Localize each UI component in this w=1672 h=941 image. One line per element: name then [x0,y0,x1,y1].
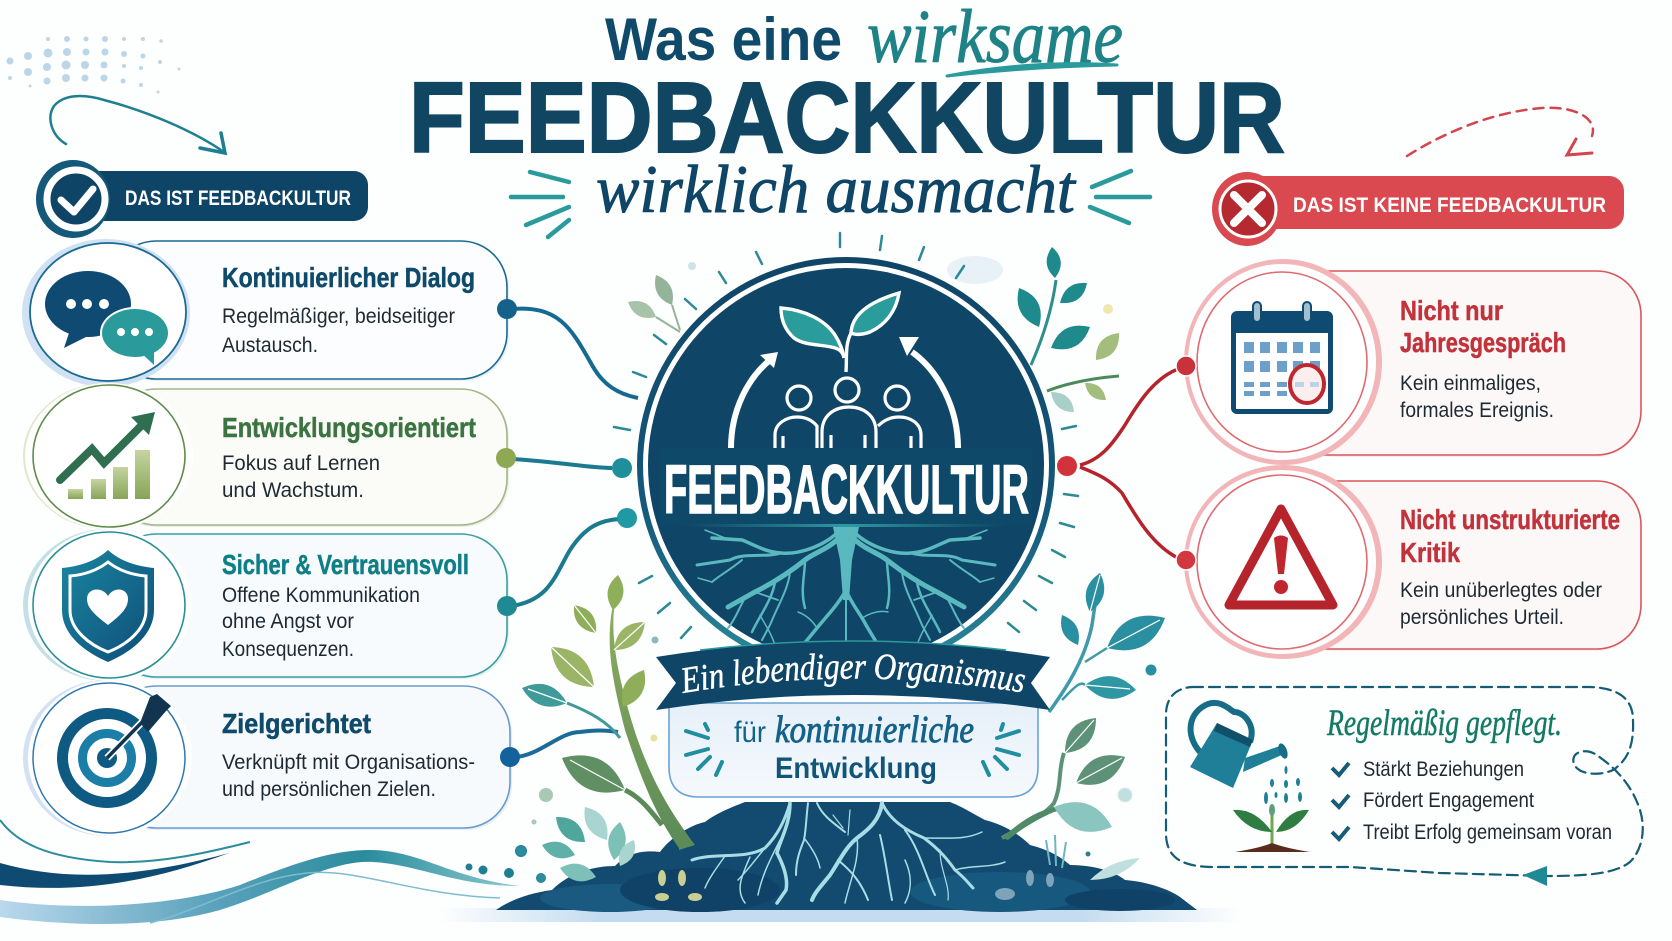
checklist: Fördert Engagement [1363,789,1534,812]
card 2: Entwicklungsorientiert: und Wachstum. [222,479,364,502]
sun ticks around hub [614,233,1078,638]
connector: card 3 to hub [512,519,620,606]
icon: target with arrow [62,694,171,802]
icon: shield with heart [62,550,154,662]
plant: top right sprig [947,247,1119,412]
panel: fuer kontinuierliche Entwicklung [669,703,1038,797]
card 2: Entwicklungsorientiert: Entwicklungsorientiert [222,412,476,443]
title [409,0,1285,227]
icon: growth chart [60,412,155,499]
title sparks [511,171,1150,237]
icon: growth arrows [731,337,958,448]
card: Nicht nur Jahresgespraech: Kein einmaliges, [1400,372,1541,395]
card 3: Sicher und Vertrauensvoll: Sicher & Vertrauensvoll [222,549,469,580]
card: Nicht nur Jahresgespraech: Nicht nur [1400,295,1503,326]
connector: card 1 to hub [512,309,638,398]
ground shadow [440,908,1240,922]
icon: sprout [781,293,899,372]
card 1: Kontinuierlicher Dialog: Austausch. [222,334,318,357]
icon: people [775,378,921,448]
card 3: Sicher und Vertrauensvoll: Offene Kommunikation [222,584,420,607]
connector dots on hub [612,456,1077,528]
panel: Regelmaessig gepflegt [1166,687,1643,886]
panel: fuer kontinuierliche Entwicklung: kontinuierliche [775,709,974,751]
icon: speech bubbles [45,271,170,365]
card: Nicht unstrukturierte Kritik: persönliches Urteil. [1400,606,1564,629]
title: wirklich ausmacht [596,151,1077,227]
connector: hub to right cards [1080,369,1178,558]
plant: left vine [522,575,695,850]
connector: card 4 to plant [516,730,618,757]
bottom-left waves [0,788,553,924]
icon: seedling [1233,804,1310,852]
card: Nicht nur Jahresgespraech [1176,259,1641,465]
title: Was eine [605,6,842,73]
header badge: Das ist Feedbackkultur: DAS IST FEEDBACKULTUR [125,187,351,210]
panel: fuer kontinuierliche Entwicklung: Entwicklung [775,752,937,785]
card: Nicht nur Jahresgespraech: Jahresgespräch [1400,327,1566,358]
plant: small foliage left [516,636,658,882]
icon: sparks [686,724,1019,775]
panel: fuer kontinuierliche Entwicklung: für [734,716,766,749]
card: Nicht nur Jahresgespraech: formales Ereignis. [1400,399,1554,422]
card 3: Sicher und Vertrauensvoll: ohne Angst vor [222,610,354,633]
dashed path with loop [1166,687,1643,876]
connector: card 2 to hub [512,459,612,468]
card 1: Kontinuierlicher Dialog: Kontinuierlicher Dialog [222,262,475,293]
icon: warning triangle [1229,509,1333,605]
hub circle: Feedbackkultur [637,257,1055,673]
hub circle: Feedbackkultur: FEEDBACKKULTUR [664,451,1029,528]
soil mound with roots [496,802,1197,912]
title: FEEDBACKKULTUR [409,62,1285,174]
header badge: Das ist keine Feedbackkultur: DAS IST KEINE FEEDBACKULTUR [1293,194,1606,217]
header badge: Das ist keine Feedbackkultur [1212,172,1624,246]
arrow: red dashed [1407,108,1593,156]
decorative dot pattern [6,36,180,94]
card 3: Sicher und Vertrauensvoll: Konsequenzen. [222,638,354,661]
plant: top left sprig [628,262,696,332]
plant: right vine [1002,573,1165,880]
roots inside hub [697,527,995,645]
card: Nicht unstrukturierte Kritik: Kein unüberlegtes oder [1400,579,1602,602]
arrowhead [1523,866,1547,886]
card 3: Sicher und Vertrauensvoll [23,529,517,681]
card 1: Kontinuierlicher Dialog: Regelmäßiger, beidseitiger [222,305,455,328]
card 4: Zielgerichtet: und persönlichen Zielen. [222,778,436,801]
panel: Regelmaessig gepflegt: Regelmäßig gepflegt. [1326,703,1562,744]
icon: calendar [1231,302,1333,414]
card 4: Zielgerichtet: Verknüpft mit Organisations- [222,751,475,774]
card: Nicht unstrukturierte Kritik: Nicht unstrukturierte [1400,504,1620,535]
card 4: Zielgerichtet: Zielgerichtet [222,708,371,739]
ribbon: Ein lebendiger Organismus: Ein lebendiger Organismus [682,653,1026,694]
card 4: Zielgerichtet [23,680,520,836]
card 2: Entwicklungsorientiert [23,383,516,529]
arrow: teal curved left [50,96,225,153]
checklist [1332,758,1612,844]
header badge: Das ist Feedbackkultur [36,160,368,238]
card: Nicht unstrukturierte Kritik [1176,465,1641,659]
card 2: Entwicklungsorientiert: Fokus auf Lernen [222,452,380,475]
icon: watering can [1190,703,1302,804]
card 1: Kontinuierlicher Dialog [22,239,517,387]
card: Nicht unstrukturierte Kritik: Kritik [1400,537,1461,568]
checklist: Stärkt Beziehungen [1363,758,1524,781]
checklist: Treibt Erfolg gemeinsam voran [1363,821,1612,844]
